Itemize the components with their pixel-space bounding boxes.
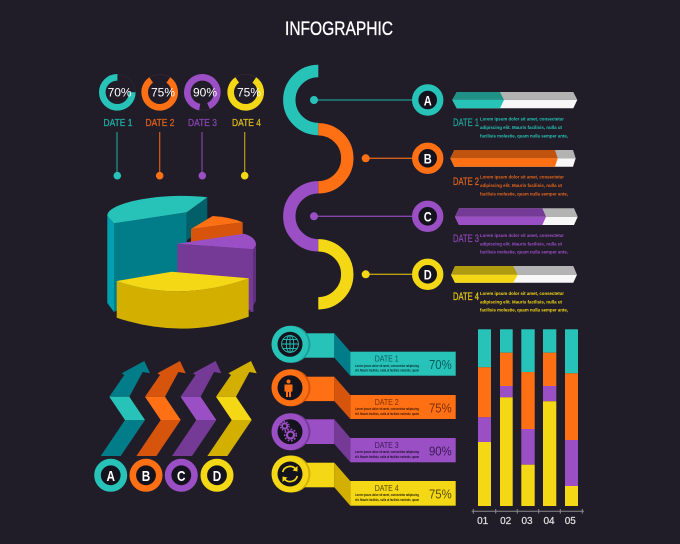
pie slice: orange [191,216,243,242]
bar 03 [521,329,535,506]
arrow badge C [168,462,194,488]
label: date 1 [104,117,133,180]
bar 01 [478,329,491,506]
ribbon row 4: DATE 4 [375,484,399,493]
bar 05 [565,329,578,506]
pie slice: teal [107,196,207,312]
label: date 4: DATE 4 [232,117,261,129]
arrow badge D [204,462,230,488]
arrow badge D: D [213,468,221,485]
text block A [453,117,569,139]
connector A: A [424,92,432,108]
ribbon row 3 [272,413,456,462]
ribbon row 2: 75% [429,400,452,415]
text block C: adipiscing elit. Mauris facilisis, nulla ut [480,241,562,247]
connector A [310,88,440,112]
progress bar C [455,208,578,225]
chart axis [472,509,584,514]
ribbon row 1: Lorem ipsum dolor sit amet, consectetur adipiscing [355,364,419,368]
ribbon row 3: elit. Mauris facilisis, nulla ut facilisis molestie, quam [355,455,419,459]
axis labels: 01 [477,516,489,527]
text block B: DATE 2 [453,176,479,188]
connector D [362,262,440,287]
ribbon row 3: DATE 3 [375,441,399,450]
progress bar B [450,150,576,167]
connector B [362,146,440,171]
connector D: D [424,267,432,283]
label: date 2 [146,117,175,180]
text block A: adipiscing elit. Mauris facilisis, nulla ut [480,125,562,131]
axis labels: 03 [521,516,533,527]
curve: teal [289,71,318,129]
pie slice: yellow [117,272,249,329]
ribbon row 2 [272,369,456,419]
ribbon row 4: elit. Mauris facilisis, nulla ut facilisis molestie, quam [355,498,419,502]
label: date 3: DATE 3 [188,117,217,129]
arrow badge C: C [177,468,186,485]
curve: purple [289,187,318,245]
donut: date 4: 75% [237,86,261,100]
icon: gears [280,422,296,441]
ribbon row 3: 90% [429,444,452,458]
donut: date 3 [184,74,220,110]
label: date 1: DATE 1 [104,117,133,129]
text block B: adipiscing elit. Mauris facilisis, nulla ut [480,183,562,189]
donut: date 1 [99,74,135,110]
label: date 3 [188,117,217,180]
ribbon row 1: elit. Mauris facilisis, nulla ut facilisis molestie, quam [355,368,419,372]
arrow C [172,361,221,456]
arrow badge A [98,462,124,488]
s-curve timeline [289,71,347,303]
axis labels: 04 [543,516,555,527]
title: INFOGRAPHIC [285,19,393,40]
bar 04 [543,329,556,506]
ribbon row 2: elit. Mauris facilisis, nulla ut facilisis molestie, quam [355,412,419,416]
donut date labels and stems [104,117,261,180]
label: date 4 [232,117,261,180]
ribbon row 1: DATE 1 [375,355,399,364]
axis labels: 02 [500,516,512,527]
icon: person [284,380,292,397]
text block A: DATE 1 [453,117,479,129]
text block C: DATE 3 [453,233,479,245]
donut: date 2: 75% [151,86,175,100]
donut: date 4 [225,71,267,113]
arrow D [207,361,257,456]
ribbon row 1: 70% [429,357,452,372]
text block A: facilisis molestie, quam nulla semper ante, [480,133,569,139]
text block D: DATE 4 [453,291,479,303]
axis labels [477,516,576,527]
ribbon row 1 [272,326,456,376]
curve: orange [318,129,347,187]
ribbon row 4: Lorem ipsum dolor sit amet, consectetur adipiscing [355,493,419,497]
text block D: facilisis molestie, quam nulla semper ante, [480,308,569,314]
donut: date 1: 70% [108,86,132,100]
donut row [99,71,267,113]
arrow B [136,361,186,456]
bar 02 [500,329,513,506]
text block C [453,233,569,256]
icon: globe [282,336,298,352]
axis labels: 05 [565,516,576,527]
ribbon row 4: 75% [429,486,452,502]
ribbon row 2: DATE 2 [375,398,399,407]
text block B: facilisis molestie, quam nulla semper ante, [480,192,569,198]
connector C: C [424,209,432,225]
text block D: adipiscing elit. Mauris facilisis, nulla ut [480,299,562,305]
connector B: B [424,151,432,167]
curve: yellow [318,245,347,303]
label: date 2: DATE 2 [146,117,175,129]
stacked bar chart [472,329,584,527]
text block A: Lorem ipsum dolor sit amet, consectetur [480,117,564,123]
ribbon row 3: Lorem ipsum dolor sit amet, consectetur adipiscing [355,450,419,454]
donut: date 2 [139,71,181,113]
progress bar D [451,266,577,283]
text block C: facilisis molestie, quam nulla semper ante, [480,250,569,256]
arrow A [101,361,150,456]
text block B: Lorem ipsum dolor sit amet, consectetur [480,174,564,180]
arrow badge B [133,462,159,488]
text block C: Lorem ipsum dolor sit amet, consectetur [480,233,564,239]
donut: date 3: 90% [193,86,217,100]
ribbon row 2: Lorem ipsum dolor sit amet, consectetur adipiscing [355,407,419,411]
arrow badge A: A [106,468,115,485]
icon: refresh arrows [282,466,298,482]
3d pie chart [107,196,256,329]
text block D: Lorem ipsum dolor sit amet, consectetur [480,291,564,297]
pie slice: purple [177,234,256,312]
text block D [453,291,569,314]
ribbon row 4 [272,456,456,506]
arrow badge B: B [142,468,150,485]
connector C [310,204,440,229]
progress bar A [452,92,577,108]
text block B [453,174,569,198]
